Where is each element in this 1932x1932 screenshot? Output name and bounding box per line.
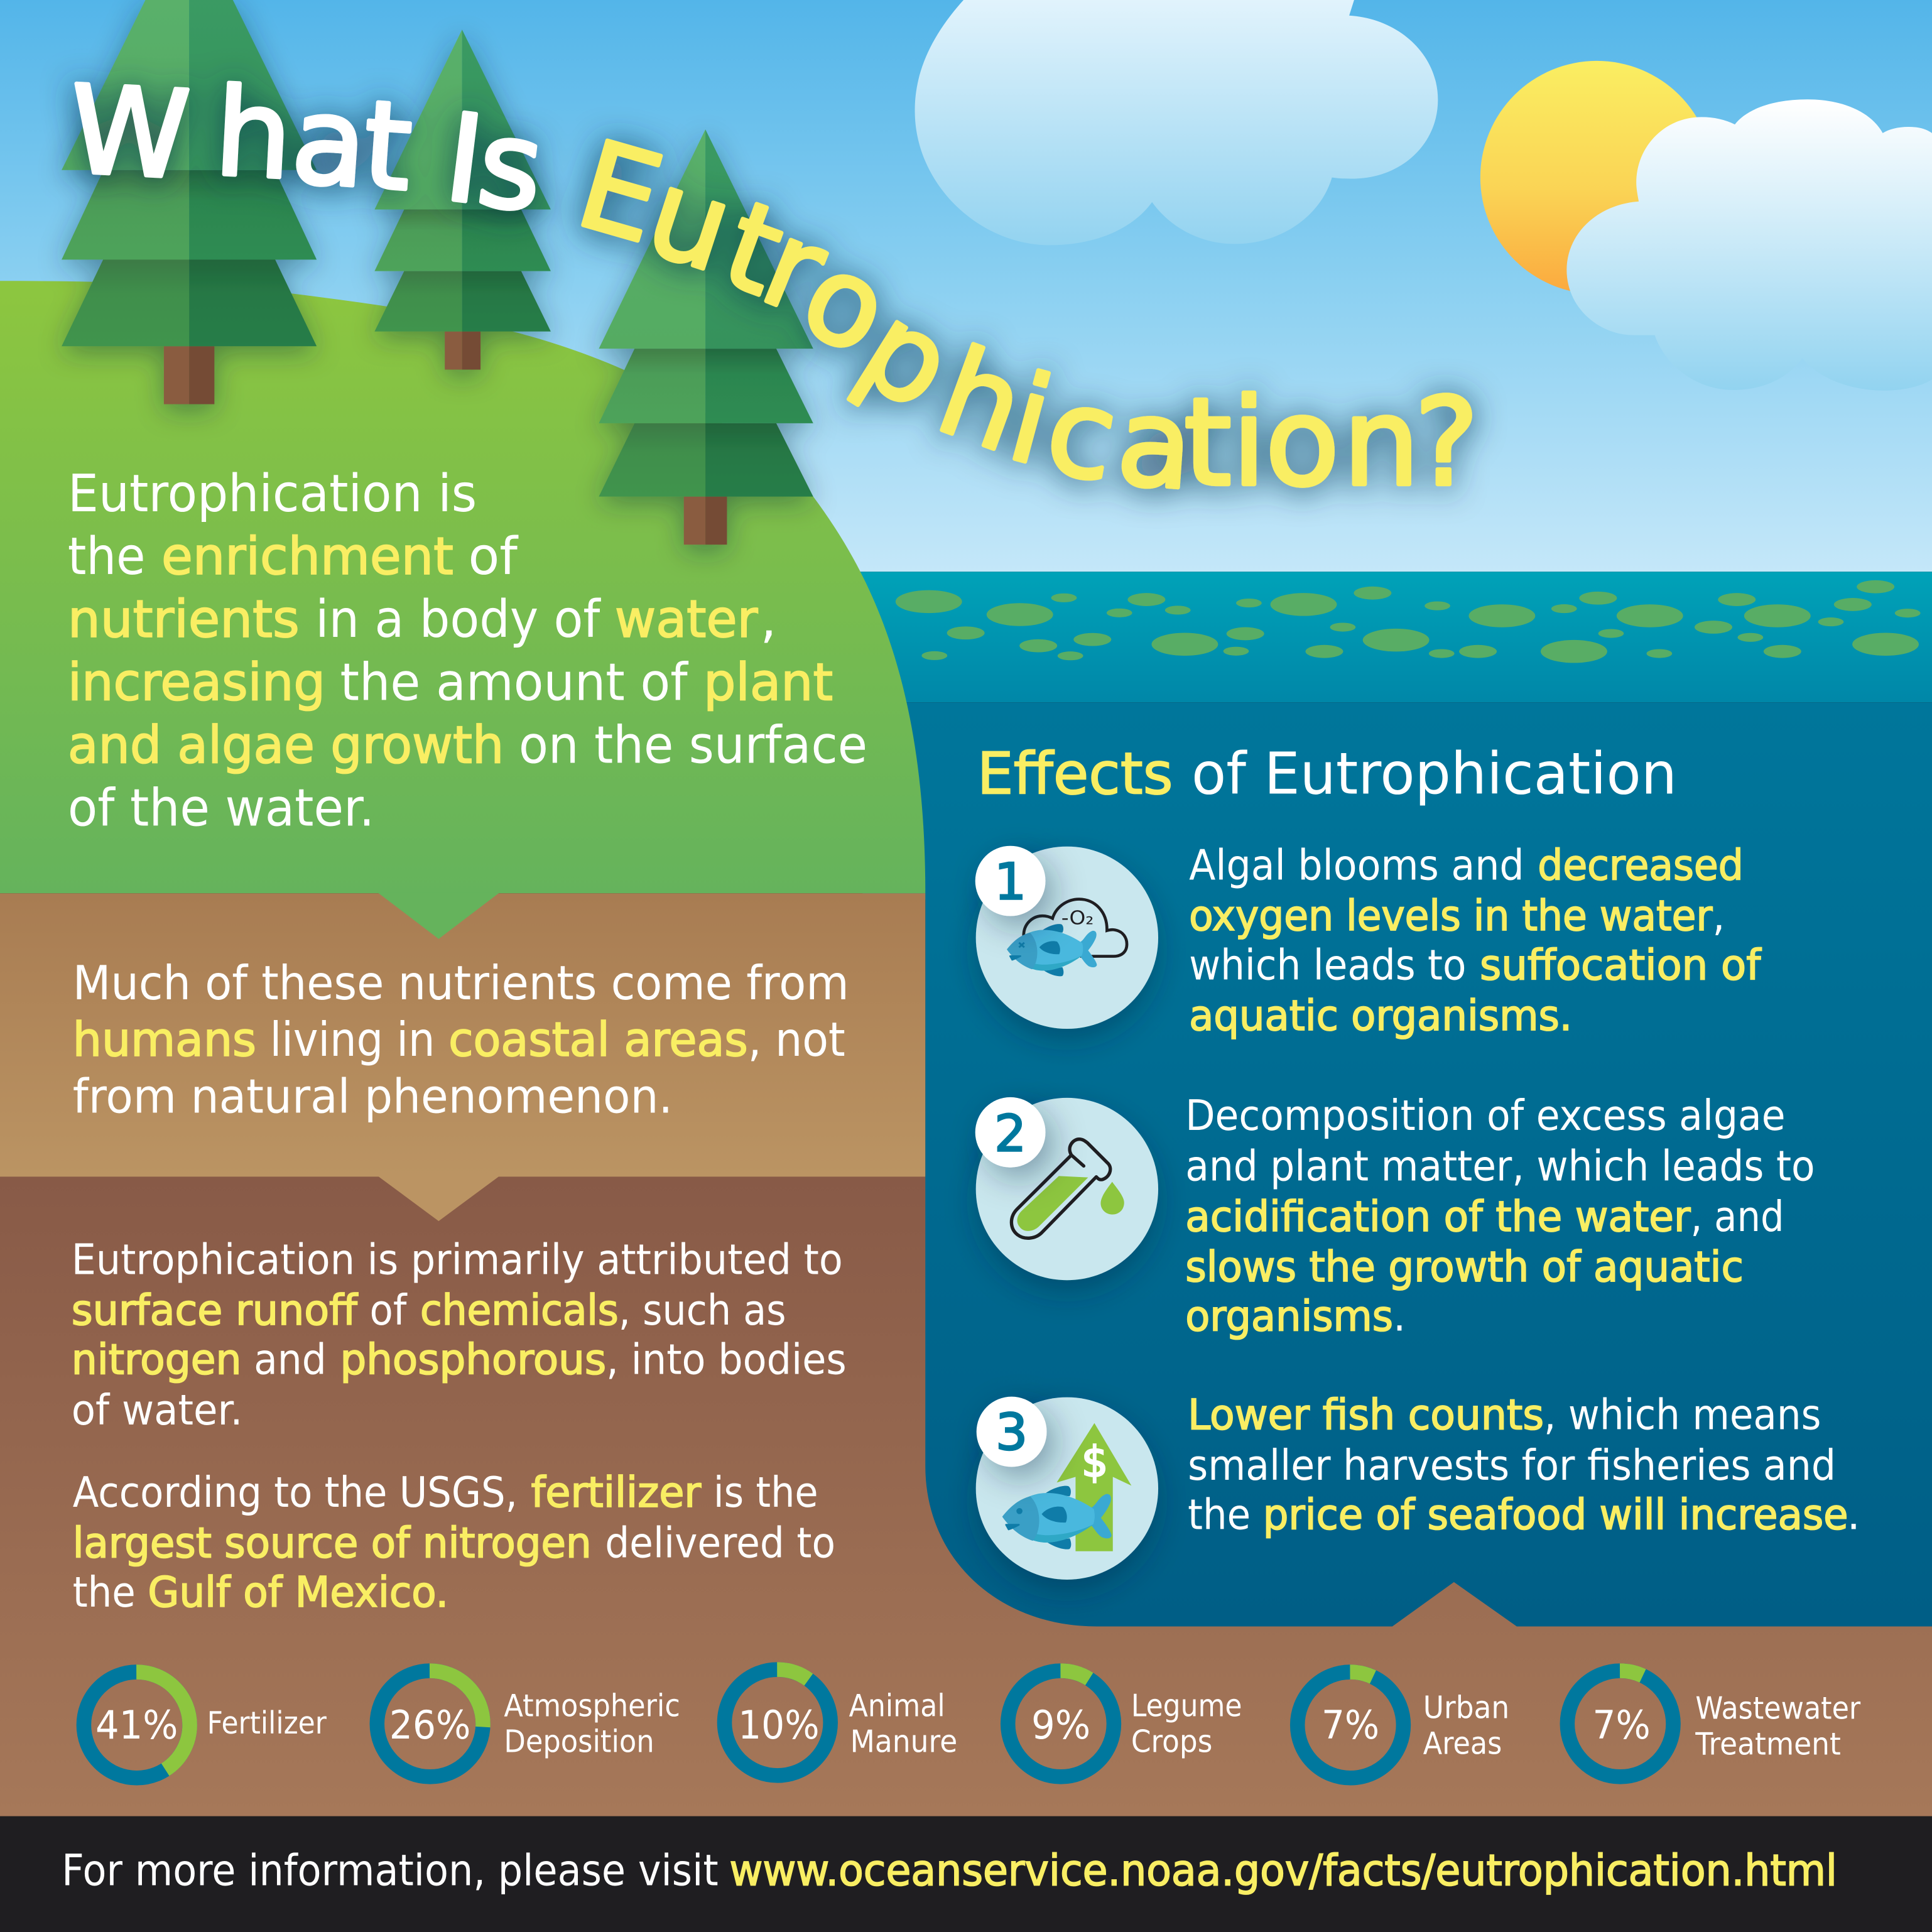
- text block: definition: of: [468, 527, 519, 587]
- arrow notch: light brown into dark brown: [377, 1175, 500, 1221]
- donut chart: atmospheric deposition 26%: Deposition: [504, 1723, 654, 1760]
- tree: right: [599, 129, 813, 545]
- text block: surface runoff: of: [370, 1286, 408, 1335]
- donut chart: fertilizer 41%: [84, 1672, 327, 1778]
- footer bar: For more information, please visit: [62, 1845, 719, 1896]
- text block: USGS fertilizer: [73, 1468, 835, 1617]
- effect 3: text: the: [1188, 1490, 1251, 1539]
- effect 2: text: and plant matter, which leads to: [1185, 1141, 1815, 1190]
- number badge 3: [977, 1397, 1046, 1467]
- text block: surface runoff: nitrogen: [72, 1335, 241, 1384]
- text block: surface runoff: chemicals: [420, 1286, 619, 1335]
- effect 3: text: [1188, 1391, 1860, 1539]
- effect 1: text: decreased: [1538, 841, 1744, 890]
- donut chart: animal manure 10%: [725, 1669, 957, 1776]
- text block: surface runoff: , into bodies: [606, 1335, 847, 1384]
- text block: definition: ,: [760, 590, 777, 649]
- number badge 2: 2: [994, 1104, 1026, 1163]
- number badge 1: [975, 846, 1046, 916]
- tree: left: [62, 0, 317, 404]
- text block: USGS fertilizer: delivered to: [605, 1519, 835, 1568]
- text block: definition: the amount of: [340, 653, 689, 712]
- text block: human sources: , not: [748, 1012, 845, 1067]
- text block: definition: water: [615, 590, 758, 649]
- text block: USGS fertilizer: is the: [714, 1468, 818, 1517]
- effect 1: icon: [975, 846, 1158, 1029]
- text block: definition: increasing: [68, 653, 325, 712]
- donut chart: urban areas 7%: Areas: [1423, 1725, 1502, 1762]
- effect 3: text: price of seafood will increase: [1263, 1490, 1848, 1539]
- text block: USGS fertilizer: the: [73, 1568, 136, 1617]
- effect 1: text: which leads to: [1189, 941, 1466, 990]
- donut chart: wastewater treatment 7%: Wastewater: [1695, 1690, 1861, 1727]
- effect 1: text: [1189, 841, 1762, 1040]
- donut chart: animal manure 10%: Animal: [849, 1688, 945, 1724]
- text block: human sources: living in: [270, 1012, 435, 1067]
- donut chart: wastewater treatment 7%: 7%: [1593, 1702, 1651, 1748]
- text block: human sources: from natural phenomenon.: [73, 1069, 673, 1124]
- donut chart: wastewater treatment 7%: Treatment: [1695, 1726, 1841, 1762]
- title: Eutrophication?: [564, 115, 1479, 517]
- effect 2: text: acidification of the water: [1185, 1192, 1691, 1241]
- donut chart: atmospheric deposition 26%: [377, 1671, 680, 1777]
- donut chart: animal manure 10%: 10%: [738, 1702, 820, 1748]
- effect 2: text: Decomposition of excess algae: [1185, 1091, 1786, 1140]
- panel: effects background (deep water): [862, 702, 1932, 1626]
- effect 3: icon: [976, 1397, 1158, 1580]
- title: What Is: [66, 60, 550, 240]
- text block: surface runoff: and: [254, 1335, 327, 1384]
- cloud: upper centre: [915, 0, 1438, 245]
- text block: USGS fertilizer: Gulf of Mexico.: [148, 1568, 448, 1617]
- text block: definition: in a body of: [315, 590, 601, 649]
- effect 2: text: , and: [1691, 1192, 1784, 1241]
- heading: effects of eutrophication: of Eutrophication: [1191, 739, 1677, 807]
- icon: fish: [1002, 1486, 1112, 1549]
- text block: USGS fertilizer: fertilizer: [531, 1468, 702, 1517]
- donut chart: atmospheric deposition 26%: 26%: [389, 1702, 470, 1748]
- panel: light brown soil layer: [0, 893, 925, 1176]
- donut chart: fertilizer 41%: Fertilizer: [207, 1705, 327, 1741]
- effect 3: text: Lower fish counts: [1188, 1391, 1544, 1440]
- effect 3: text: .: [1847, 1490, 1860, 1539]
- effect 2: text: [1185, 1091, 1815, 1341]
- icon: cloud with minus O2: -O₂: [1061, 908, 1094, 930]
- text block: definition: Eutrophication is: [68, 464, 477, 524]
- text block: surface runoff: [72, 1235, 847, 1435]
- donut chart: wastewater treatment 7%: [1567, 1671, 1861, 1777]
- sky background: [0, 0, 1932, 572]
- footer bar: [0, 1816, 1932, 1932]
- text block: definition: enrichment: [161, 527, 453, 587]
- panel: green hill: [0, 281, 925, 893]
- effect 3: text: smaller harvests for fisheries and: [1188, 1441, 1836, 1490]
- effect 1: text: Algal blooms and: [1189, 841, 1524, 890]
- effect 2: text: slows the growth of aquatic: [1185, 1242, 1744, 1291]
- text block: human sources: Much of these nutrients come from: [73, 956, 849, 1011]
- dark brown soil layer: [0, 1176, 1932, 1818]
- donut chart: fertilizer 41%: 41%: [95, 1702, 178, 1748]
- text block: definition: plant: [703, 653, 833, 712]
- text block: definition: of the water.: [68, 778, 374, 838]
- text block: surface runoff: surface runoff: [72, 1286, 359, 1335]
- text block: USGS fertilizer: largest source of nitrogen: [73, 1519, 592, 1568]
- icon: cloud with minus O2: [1024, 899, 1127, 957]
- text block: USGS fertilizer: According to the USGS,: [73, 1468, 518, 1517]
- sun: [1480, 61, 1713, 294]
- donut chart: urban areas 7%: [1298, 1672, 1509, 1778]
- text block: definition: on the surface: [519, 715, 867, 775]
- text block: definition: nutrients: [68, 590, 300, 649]
- text block: definition: [68, 464, 867, 838]
- effect 3: text: , which means: [1544, 1391, 1821, 1440]
- donut chart: legume crops 9%: 9%: [1031, 1702, 1090, 1748]
- title: [66, 60, 1479, 517]
- text block: surface runoff: of water.: [72, 1386, 242, 1435]
- number badge 2: [975, 1097, 1046, 1168]
- water surface with algae: [850, 572, 1932, 702]
- text block: human sources: coastal areas: [448, 1012, 748, 1067]
- tree: middle: [374, 30, 551, 370]
- effect 1: text: suffocation of: [1480, 941, 1762, 990]
- effect 2: text: organisms.: [1185, 1292, 1406, 1341]
- icon: green drop: [1100, 1182, 1124, 1215]
- text block: human sources: humans: [73, 1012, 256, 1067]
- text block: definition: and algae growth: [68, 715, 504, 775]
- donut chart: animal manure 10%: Manure: [850, 1723, 957, 1760]
- arrow notch: green into light brown: [377, 892, 500, 939]
- number badge 1: 1: [994, 852, 1026, 911]
- text block: surface runoff: Eutrophication is primarily attributed to: [72, 1235, 843, 1284]
- heading: effects of eutrophication: Effects: [977, 739, 1173, 807]
- text block: definition: the: [68, 527, 145, 587]
- text block: surface runoff: , such as: [619, 1286, 786, 1335]
- number badge 3: 3: [996, 1403, 1028, 1462]
- icon: price up arrow: $: [1082, 1438, 1108, 1487]
- effect 2: icon: [975, 1097, 1158, 1280]
- effect 1: text: oxygen levels in the water,: [1189, 891, 1725, 940]
- icon: dead fish: [1007, 924, 1097, 976]
- footer bar: www.oceanservice.noaa.gov/facts/eutrophication.html: [729, 1845, 1837, 1896]
- icon: price up arrow: [1056, 1423, 1131, 1551]
- icon: test tube: [1011, 1139, 1110, 1238]
- donut chart: urban areas 7%: Urban: [1423, 1690, 1509, 1726]
- donut chart: legume crops 9%: [1008, 1671, 1242, 1777]
- cloud: right over sun: [1566, 99, 1932, 391]
- donut chart: atmospheric deposition 26%: Atmospheric: [504, 1688, 680, 1724]
- text block: human sources: [73, 956, 849, 1124]
- donut chart: urban areas 7%: 7%: [1321, 1702, 1379, 1748]
- text block: surface runoff: phosphorous: [340, 1335, 606, 1384]
- effect 1: text: aquatic organisms.: [1189, 991, 1572, 1040]
- donut chart: legume crops 9%: Legume: [1131, 1688, 1242, 1724]
- donut chart: legume crops 9%: Crops: [1131, 1723, 1212, 1760]
